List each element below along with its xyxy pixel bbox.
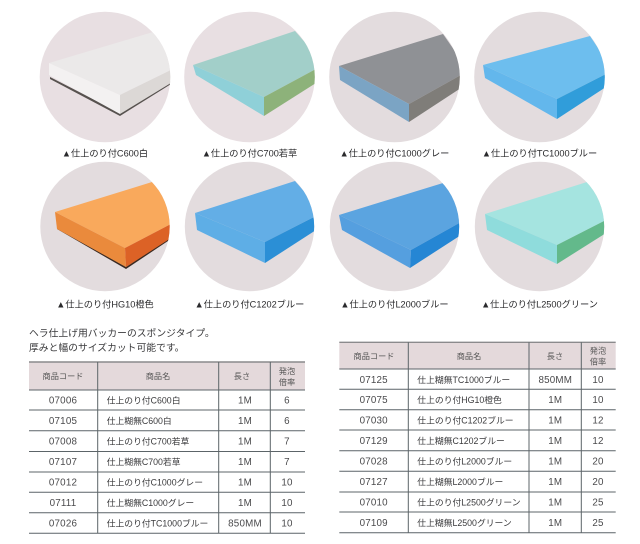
table header: left: 発泡 (279, 366, 295, 376)
table rows: left: 1M (238, 457, 252, 468)
table rows: right: 20 (592, 456, 604, 468)
table rows: right (360, 374, 604, 529)
caption: C700 young-grass: ▲仕上のり付C700若草 (202, 148, 297, 158)
table rows: right: 07125 (360, 375, 388, 386)
table header: right: 商品コード (354, 351, 394, 361)
table rows: right: 07028 (360, 456, 388, 468)
table rows: right: 仕上糊無C1202ブルー (417, 435, 505, 446)
table header: left: 長さ (234, 372, 250, 381)
table rows: right: 1M (548, 477, 562, 488)
panel: C1000 grey sample (328, 11, 461, 143)
table rows: left: 10 (281, 498, 293, 509)
table rows: right: 07129 (360, 436, 388, 447)
table rows: left: 仕上糊無C700若草 (107, 456, 181, 467)
table rows: left: 10 (281, 478, 293, 488)
table rows: right: 仕上糊無TC1000ブルー (417, 374, 510, 385)
table rows: right: 仕上のり付L2500グリーン (417, 496, 521, 508)
panel: L2500 green sample (474, 160, 606, 292)
table rows: left: 1M (238, 498, 252, 509)
table rows: left: 仕上のり付C700若草 (107, 436, 190, 446)
table rows: left: 仕上糊無C1000グレー (107, 497, 194, 508)
table rows: left: 1M (238, 396, 252, 406)
text block: product description: 厚みと幅のサイズカット可能です。 (29, 341, 184, 354)
table rows: left: 仕上のり付C600白 (107, 394, 181, 406)
table: right product list (339, 342, 616, 533)
table rows: left: 1M (238, 436, 252, 448)
panel: L2000 blue sample (328, 160, 461, 292)
text block: product description: ヘラ仕上げ用バッカーのスポンジタイプ。 (29, 326, 215, 340)
table header: right: 長さ (547, 352, 563, 361)
table rows: right: 仕上のり付HG10橙色 (417, 394, 502, 405)
table rows: left: 仕上のり付TC1000ブルー (107, 518, 208, 528)
table rows: right: 仕上糊無L2500グリーン (417, 517, 512, 528)
table rows: right: 1M (548, 416, 562, 426)
table rows: left: 6 (284, 396, 290, 406)
table rows: left: 07012 (49, 478, 77, 488)
text block: product description (29, 326, 215, 354)
table rows: right: 07127 (360, 477, 388, 488)
table rows: right: 25 (592, 498, 604, 508)
panel: TC1000 blue sample (474, 11, 606, 143)
table: left product list (29, 362, 305, 533)
table rows: left: 仕上のり付C1000グレー (107, 476, 203, 488)
table rows: left: 7 (284, 436, 290, 448)
table header: left: 商品コード (43, 371, 83, 381)
table rows: right: 12 (592, 436, 604, 447)
table rows: left: 6 (284, 416, 290, 427)
table header: right (354, 346, 606, 366)
panel: C700 young-grass sample (184, 11, 316, 143)
table rows: left: 1M (238, 478, 252, 488)
table rows: left: 1M (238, 416, 252, 427)
table rows: right: 仕上のり付C1202ブルー (417, 414, 514, 426)
table rows: right: 1M (548, 518, 562, 529)
caption: L2000 blue: ▲仕上のり付L2000ブルー (340, 298, 449, 310)
table rows: right: 07109 (360, 518, 388, 529)
table rows: right: 20 (592, 477, 604, 488)
table rows: right: 1M (548, 456, 562, 468)
table rows: right: 12 (592, 416, 604, 426)
table rows: left: 07008 (49, 436, 77, 448)
table rows: left: 07105 (49, 416, 77, 427)
table rows: left: 10 (281, 518, 293, 530)
table rows: left: 07111 (50, 498, 76, 509)
table header: left: 商品名 (146, 371, 170, 381)
panel: C1202 blue sample (184, 160, 316, 292)
table rows: right: 07010 (360, 498, 388, 508)
caption: TC1000 blue: ▲仕上のり付TC1000ブルー (482, 148, 597, 158)
caption: HG10 orange: ▲仕上のり付HG10橙色 (56, 298, 154, 310)
caption: C1202 blue: ▲仕上のり付C1202ブルー (195, 298, 304, 310)
table rows: left: 仕上糊無C600白 (107, 415, 172, 426)
panel: HG10 orange sample (39, 160, 171, 292)
table rows: right: 10 (592, 375, 604, 386)
table rows: right: 10 (592, 395, 604, 406)
table rows: right: 1M (548, 436, 562, 447)
table rows: left (49, 394, 293, 530)
caption: C1000 grey: ▲仕上のり付C1000グレー (340, 148, 449, 158)
table rows: right: 1M (548, 498, 562, 508)
table rows: left: 07026 (49, 518, 77, 530)
table rows: left: 7 (284, 457, 290, 468)
table rows: right: 仕上糊無L2000ブルー (417, 476, 503, 487)
table header: right: 発泡 (590, 346, 606, 356)
table header: right: 倍率 (590, 356, 606, 366)
table rows: right: 07075 (360, 395, 388, 406)
table rows: right: 07030 (360, 416, 388, 426)
table rows: right: 仕上のり付L2000ブルー (417, 456, 512, 466)
table rows: right: 25 (592, 518, 604, 529)
panel: C600 white sample (39, 11, 171, 143)
table rows: left: 850MM (228, 518, 262, 530)
table rows: right: 850MM (538, 375, 572, 386)
table header: right: 商品名 (457, 351, 481, 361)
table rows: left: 07006 (49, 396, 77, 406)
table rows: left: 07107 (49, 457, 77, 468)
table header: left: 倍率 (279, 377, 295, 387)
caption: L2500 green: ▲仕上のり付L2500グリーン (481, 298, 598, 310)
table rows: right: 1M (548, 395, 562, 406)
caption: C600 white: ▲仕上のり付C600白 (62, 148, 148, 158)
table header: left (43, 366, 295, 387)
